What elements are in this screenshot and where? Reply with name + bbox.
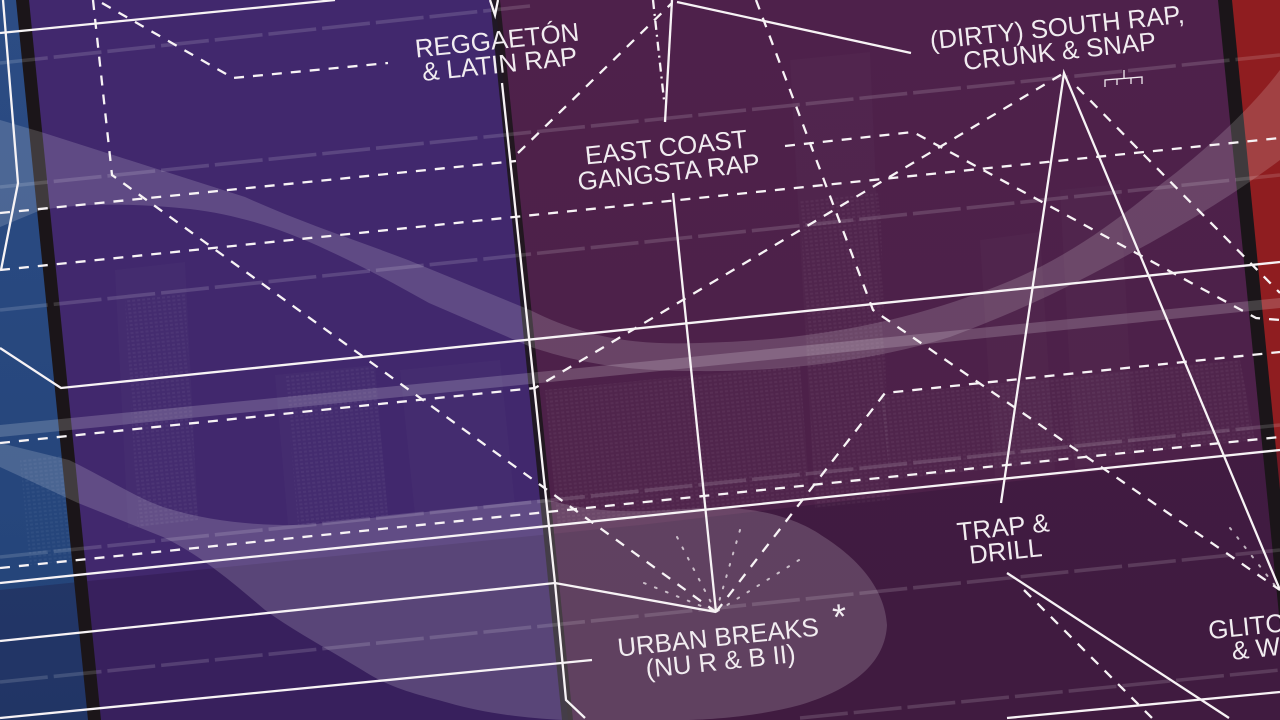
icon: small fork symbol [1105,70,1142,87]
label: reggaeton and latin rap: REGGAETÓN [414,18,581,64]
label: reggaeton and latin rap: & LATIN RAP [421,43,579,87]
label: trap and drill: DRILL [968,534,1043,570]
lower translucent swoosh and urban breaks blob [0,443,887,720]
dark water band [0,450,1280,720]
label: urban breaks: (NU R & B II) [644,640,797,684]
black column divider centre [490,0,573,720]
panel: maroon genre column [495,0,1280,720]
label: east coast gangsta rap: EAST COAST [584,126,749,170]
label: dirty south rap: CRUNK & SNAP [962,28,1157,76]
panel: red genre column [1225,0,1280,570]
upper translucent swoosh band [0,70,1280,371]
black column divider left [16,0,101,720]
dotted fan lines into urban breaks [644,528,1280,612]
label: east coast gangsta rap: GANGSTA RAP [576,149,761,196]
black column divider right [1218,0,1280,625]
thin translucent band [0,298,1280,437]
label: urban breaks: URBAN BREAKS [616,614,820,663]
label: dirty south rap: (DIRTY) SOUTH RAP, [929,1,1186,55]
panel: purple genre column [22,0,568,720]
skyline texture [20,52,1255,565]
asterisk: * [831,595,849,638]
label: trap and drill: TRAP & [956,509,1051,547]
panel: blue genre column [0,0,96,720]
